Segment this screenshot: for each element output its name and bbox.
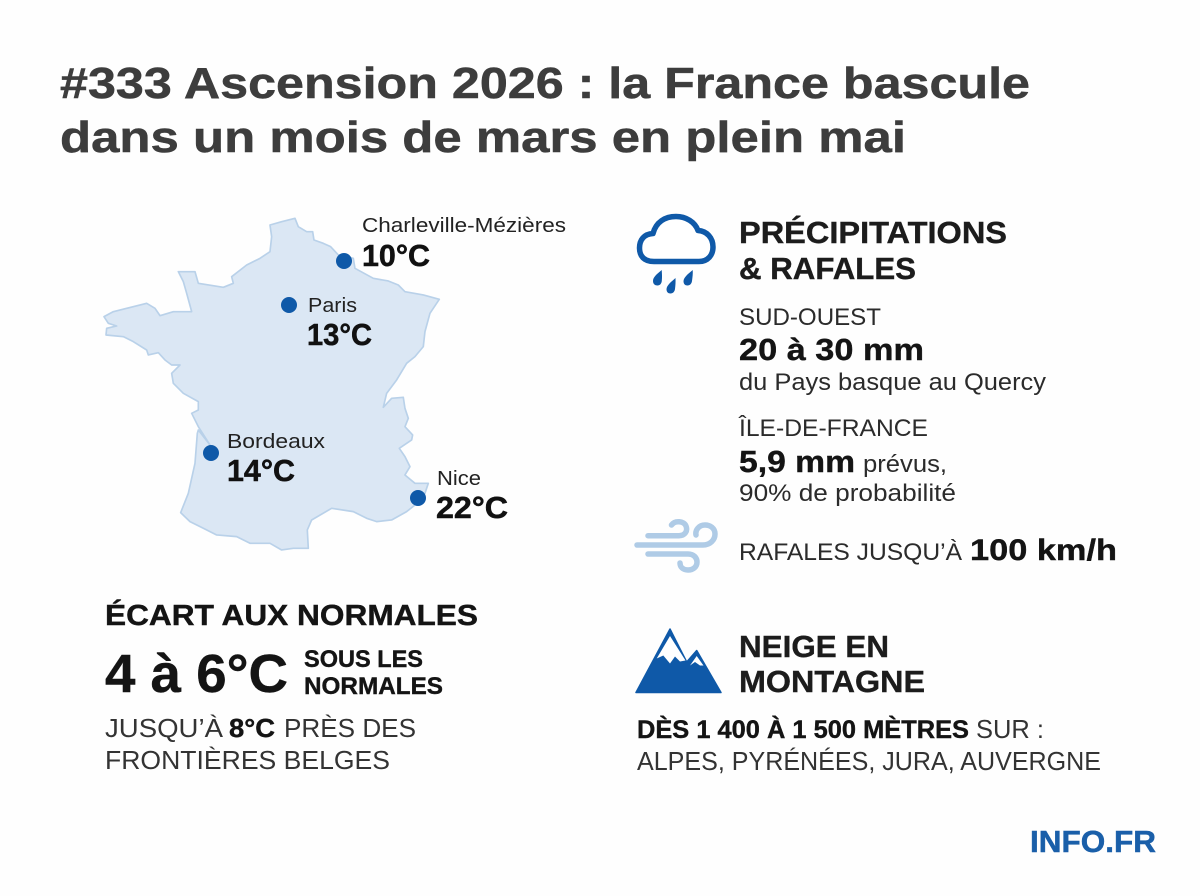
gusts: 100 km/h — [970, 534, 1117, 567]
city: Bordeaux — [203, 431, 325, 488]
details: ALPES, PYRÉNÉES, JURA, AUVERGNE — [637, 746, 1101, 776]
city: Nice: Nice — [437, 468, 481, 490]
map of France — [104, 218, 439, 550]
city: Charleville-Mézières: 10°C — [362, 238, 430, 273]
city: Paris: Paris — [308, 295, 357, 317]
Sud-Ouest: du Pays basque au Quercy — [739, 369, 1046, 396]
value caption: NORMALES — [304, 673, 443, 700]
title — [60, 59, 1030, 162]
icon: rain cloud — [640, 216, 713, 294]
title: #333 Ascension 2026 : la France bascule — [60, 59, 1030, 108]
Île-de-France: prévus, — [863, 451, 947, 478]
panel: temperature map — [104, 215, 566, 550]
gusts — [739, 534, 1117, 567]
Île-de-France: ÎLE-DE-FRANCE — [738, 415, 928, 442]
details: SUR : — [976, 714, 1044, 744]
details — [637, 714, 1101, 776]
city: Paris: 13°C — [307, 317, 372, 352]
panel: précipitations et rafales — [637, 215, 1117, 570]
note: FRONTIÈRES BELGES — [105, 745, 390, 775]
heading — [739, 215, 1007, 286]
Île-de-France: 90% de probabilité — [739, 480, 956, 507]
Sud-Ouest — [739, 304, 1046, 396]
city: Charleville-Mézières — [336, 215, 566, 273]
city: Nice: 22°C — [436, 490, 508, 525]
city: Charleville-Mézières: Charleville-Mézières — [362, 215, 566, 237]
heading: PRÉCIPITATIONS — [739, 215, 1007, 250]
Île-de-France — [738, 415, 956, 507]
Sud-Ouest: SUD-OUEST — [739, 304, 881, 331]
Île-de-France: 5,9 mm — [739, 444, 855, 479]
title: dans un mois de mars en plein mai — [60, 113, 906, 162]
Sud-Ouest: 20 à 30 mm — [739, 332, 924, 367]
city: Bordeaux: 14°C — [227, 453, 295, 488]
panel: écart aux normales — [105, 598, 478, 775]
logo: INFO.FR — [1030, 824, 1156, 859]
note: 8°C — [229, 713, 275, 743]
details: DÈS 1 400 À 1 500 MÈTRES — [637, 715, 969, 744]
gusts: RAFALES JUSQU’À — [739, 539, 962, 566]
heading — [739, 629, 925, 699]
icon: wind — [637, 522, 715, 570]
city: Paris — [281, 295, 372, 352]
heading: & RAFALES — [739, 251, 916, 286]
note: PRÈS DES — [284, 713, 416, 743]
big value: 4 à 6°C — [105, 644, 288, 704]
city: Nice — [410, 468, 508, 525]
heading: ÉCART AUX NORMALES — [105, 598, 478, 632]
note: JUSQU’À — [105, 713, 224, 743]
icon: mountain — [636, 629, 721, 692]
panel: neige en montagne — [636, 629, 1101, 776]
heading: NEIGE EN — [739, 629, 889, 664]
heading: MONTAGNE — [739, 664, 925, 699]
value caption: SOUS LES — [304, 646, 423, 673]
city: Bordeaux: Bordeaux — [227, 431, 325, 453]
value caption — [304, 646, 443, 700]
note — [105, 713, 416, 775]
